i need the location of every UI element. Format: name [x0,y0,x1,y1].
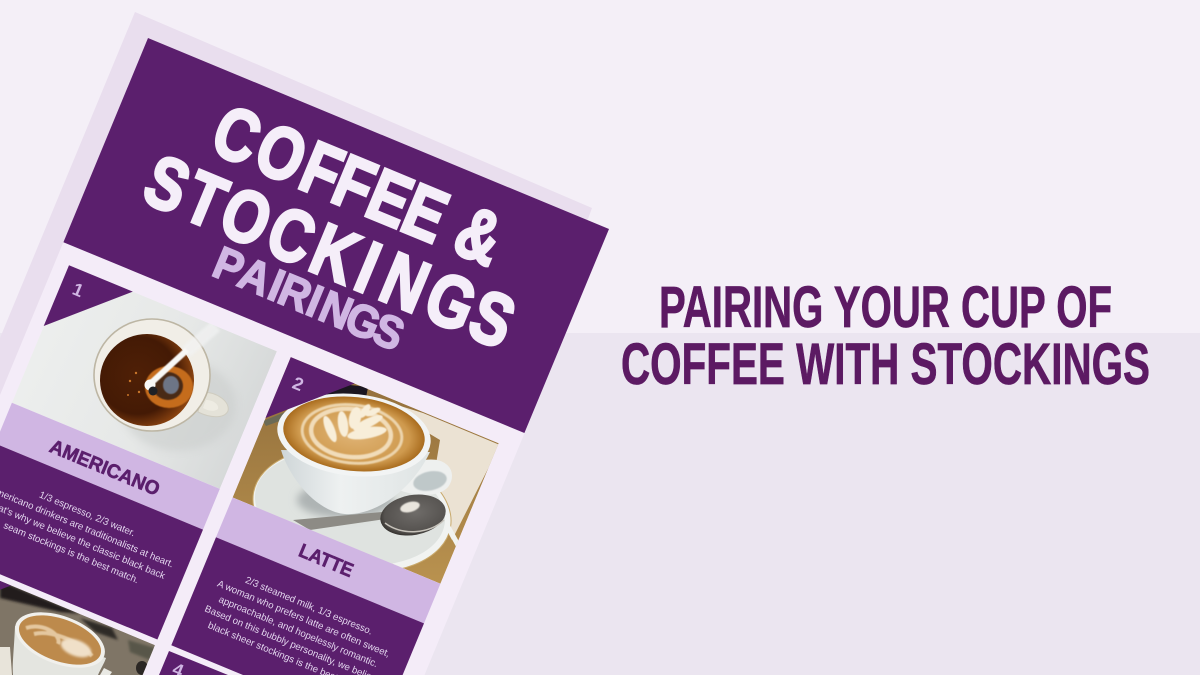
name: AMERICANO [46,436,163,501]
photo: coffee cup with milk splash [12,292,276,488]
number: 1 [70,279,86,301]
photo: coffee with swirl [0,581,155,675]
name band [216,498,440,623]
description text: 2/3 steamed milk, 1/3 espresso. [243,575,374,638]
panel: latte [171,357,500,675]
description text: seam stockings is the best match. [2,520,140,586]
photo: latte art cup [233,357,500,587]
number triangle [0,581,11,590]
title: STOCKINGS [133,139,526,365]
description panel [0,446,203,640]
panel: third coffee [0,581,155,675]
poster page [0,38,609,675]
name: LATTE [295,540,356,582]
number triangle [159,651,228,675]
poster shadow sheet [0,12,592,675]
name band [0,403,220,530]
heading [621,275,1150,397]
description text [0,472,180,596]
panel: card four [159,651,228,675]
subtitle: PAIRINGS [206,237,411,361]
panel: americano [0,265,277,640]
title: COFFEE & [201,89,515,282]
description text: 1/3 espresso, 2/3 water. [37,490,137,539]
description text: A woman who prefers latte are often sweet, [215,579,391,660]
header panel [63,38,609,433]
description text: approachable, and hopelessly romantic. [217,594,379,670]
number triangle [266,357,355,418]
description text [197,565,399,675]
description panel [171,537,424,675]
number triangle [44,265,133,326]
number: 2 [290,373,306,395]
